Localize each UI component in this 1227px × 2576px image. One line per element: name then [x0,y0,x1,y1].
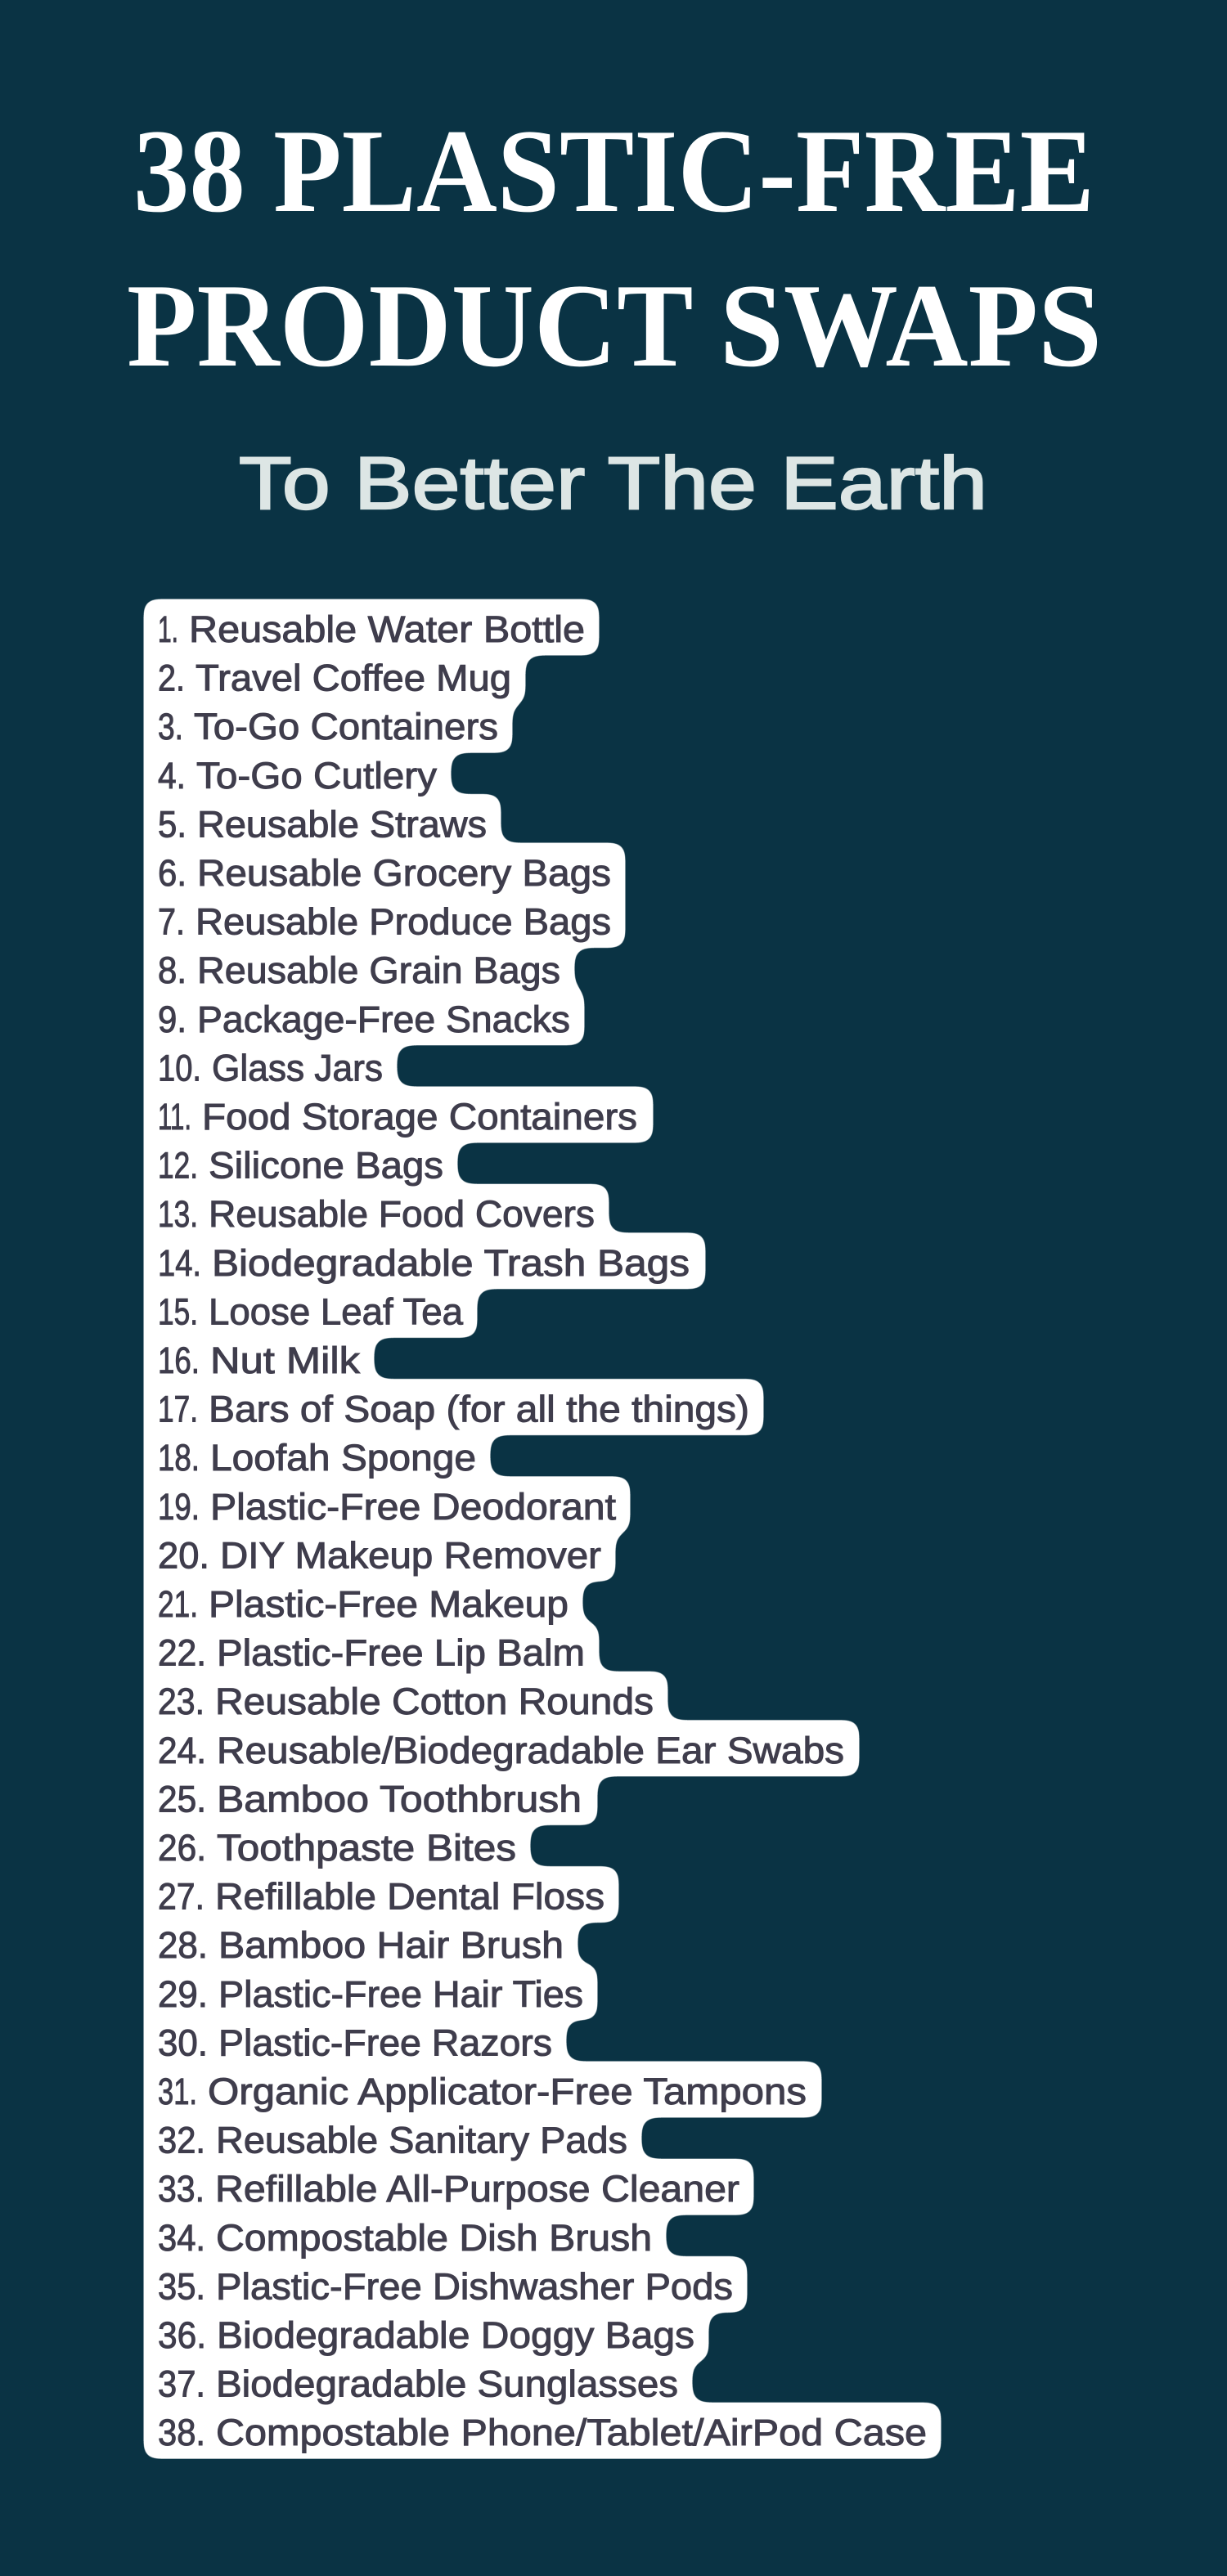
item 11: Food Storage Containers [202,1096,637,1138]
item 23: Reusable Cotton Rounds [215,1681,654,1722]
item 4: 4. [158,755,186,797]
item 13: Reusable Food Covers [209,1193,595,1235]
item 5: Reusable Straws [197,803,487,845]
item 34: Compostable Dish Brush [216,2217,652,2259]
item 22: Plastic-Free Lip Balm [217,1632,585,1674]
item 12: Silicone Bags [209,1145,443,1187]
item 21: 21. [158,1583,198,1625]
item 17: 17. [158,1389,198,1430]
item 25: 25. [158,1778,206,1820]
item 35: Plastic-Free Dishwasher Pods [216,2265,733,2307]
white list backing shape [143,599,942,2459]
title: PRODUCT SWAPS [127,259,1102,392]
item 13: 13. [158,1193,198,1235]
item 28: Bamboo Hair Brush [218,1924,564,1966]
item 23: 23. [158,1681,204,1722]
item 15: Loose Leaf Tea [209,1290,464,1332]
item 7: Reusable Produce Bags [196,901,611,943]
item 33: 33. [158,2168,204,2210]
item 36: 36. [158,2314,206,2356]
item 16: 16. [158,1340,200,1381]
item 26: 26. [158,1827,206,1869]
item 19: Plastic-Free Deodorant [210,1486,617,1528]
item 30: 30. [158,2022,208,2063]
item 9: Package-Free Snacks [197,999,570,1040]
item 37: 37. [158,2363,205,2405]
item 29: Plastic-Free Hair Ties [218,1973,583,2015]
item 26: Toothpaste Bites [217,1827,516,1869]
item 15: 15. [158,1290,198,1332]
item 1: 1. [158,608,178,650]
item 31: 31. [158,2071,197,2112]
item 28: 28. [158,1924,208,1966]
item 27: Refillable Dental Floss [215,1876,605,1918]
item 4: To-Go Cutlery [196,755,438,797]
item 22: 22. [158,1632,206,1674]
item 31: Organic Applicator-Free Tampons [208,2071,807,2112]
item 12: 12. [158,1145,198,1187]
item 30: Plastic-Free Razors [218,2022,552,2063]
item 14: 14. [158,1242,201,1284]
item 17: Bars of Soap (for all the things) [209,1389,749,1430]
item 11: 11. [158,1096,191,1138]
item 8: Reusable Grain Bags [197,949,560,991]
item 3: To-Go Containers [194,706,498,747]
item 18: 18. [158,1437,200,1479]
subtitle: To Better The Earth [239,442,987,525]
item 37: Biodegradable Sunglasses [216,2363,678,2405]
item 18: Loofah Sponge [210,1437,476,1479]
item 2: Travel Coffee Mug [196,657,511,699]
list of 38 swaps [158,608,927,2453]
item 19: 19. [158,1486,200,1528]
item 33: Refillable All-Purpose Cleaner [215,2168,739,2210]
item 1: Reusable Water Bottle [189,608,585,650]
item 2: 2. [158,657,185,699]
item 16: Nut Milk [210,1340,361,1381]
item 29: 29. [158,1973,208,2015]
item 35: 35. [158,2265,205,2307]
item 36: Biodegradable Doggy Bags [217,2314,694,2356]
item 6: 6. [158,852,187,894]
item 32: 32. [158,2120,205,2161]
item 24: Reusable/Biodegradable Ear Swabs [217,1730,844,1771]
item 3: 3. [158,706,183,747]
item 34: 34. [158,2217,205,2259]
item 20: 20. [158,1534,209,1576]
title [127,105,1102,392]
item 32: Reusable Sanitary Pads [216,2120,627,2161]
item 27: 27. [158,1876,204,1918]
item 8: 8. [158,949,187,991]
item 14: Biodegradable Trash Bags [212,1242,690,1284]
item 6: Reusable Grocery Bags [197,852,611,894]
item 5: 5. [158,803,187,845]
item 20: DIY Makeup Remover [220,1534,601,1576]
item 38: 38. [158,2412,205,2453]
item 21: Plastic-Free Makeup [209,1583,569,1625]
item 38: Compostable Phone/Tablet/AirPod Case [216,2412,927,2453]
item 10: 10. [158,1047,201,1088]
title: 38 PLASTIC-FREE [133,105,1094,237]
item 25: Bamboo Toothbrush [217,1778,582,1820]
item 9: 9. [158,999,187,1040]
item 10: Glass Jars [212,1047,383,1088]
item 7: 7. [158,901,185,943]
item 24: 24. [158,1730,206,1771]
